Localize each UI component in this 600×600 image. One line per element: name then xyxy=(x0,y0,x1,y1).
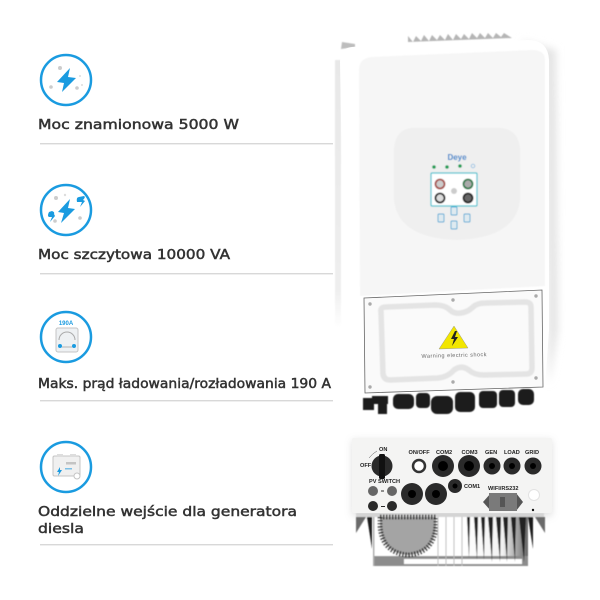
icon: ammeter 190A xyxy=(41,312,91,362)
connector panel xyxy=(352,438,552,513)
ports xyxy=(368,455,542,511)
buttons xyxy=(438,214,444,222)
switch: ON xyxy=(379,447,387,453)
icon: lightning bolt xyxy=(41,55,91,105)
switch xyxy=(360,447,392,479)
control panel xyxy=(394,128,520,240)
on/off button: ON/OFF xyxy=(408,450,430,456)
housing xyxy=(340,40,549,396)
status LEDs xyxy=(432,165,436,169)
icon: generator xyxy=(41,442,91,492)
heatsink xyxy=(356,513,545,566)
wifi port xyxy=(483,493,523,511)
icon: ammeter 190A: 190A xyxy=(59,321,74,327)
top heatsink fins xyxy=(341,33,512,49)
feature 2: peak power xyxy=(38,185,231,263)
label: max charge current: Maks. prąd ładowania/rozładowania 190 A xyxy=(38,376,332,392)
inverter front view xyxy=(335,33,558,414)
port labels: PV SWITCH xyxy=(369,479,400,485)
on/off button xyxy=(408,450,430,472)
warning text: Warning electric shock xyxy=(421,352,487,360)
feature 4: generator input xyxy=(38,442,297,537)
logo: Deye xyxy=(447,153,467,162)
label: rated power: Moc znamionowa 5000 W xyxy=(38,117,239,133)
port labels: GEN xyxy=(485,450,497,456)
feature 4: generator input: diesla xyxy=(38,521,84,537)
port labels: COM1 xyxy=(464,484,480,490)
warning plate xyxy=(364,290,543,393)
switch: OFF xyxy=(360,463,372,469)
connectors xyxy=(363,389,534,414)
warning triangle xyxy=(439,326,468,349)
front cover xyxy=(359,50,545,296)
port labels: GRID xyxy=(525,450,539,456)
inverter bottom connection view xyxy=(352,438,552,566)
port labels: WIFI/RS232 xyxy=(488,486,518,492)
icon: three lightning bolts xyxy=(41,185,91,235)
feature 1: rated power xyxy=(38,55,239,133)
port labels: COM3 xyxy=(462,450,478,456)
display xyxy=(431,173,477,206)
indicator xyxy=(528,490,540,500)
port labels: COM2 xyxy=(436,450,452,456)
feature 3: max charge current xyxy=(38,312,332,392)
label: peak power: Moc szczytowa 10000 VA xyxy=(38,247,231,263)
label: generator input: Oddzielne wejście dla generatora xyxy=(38,504,297,520)
port labels xyxy=(369,450,539,492)
port labels: LOAD xyxy=(504,450,520,456)
